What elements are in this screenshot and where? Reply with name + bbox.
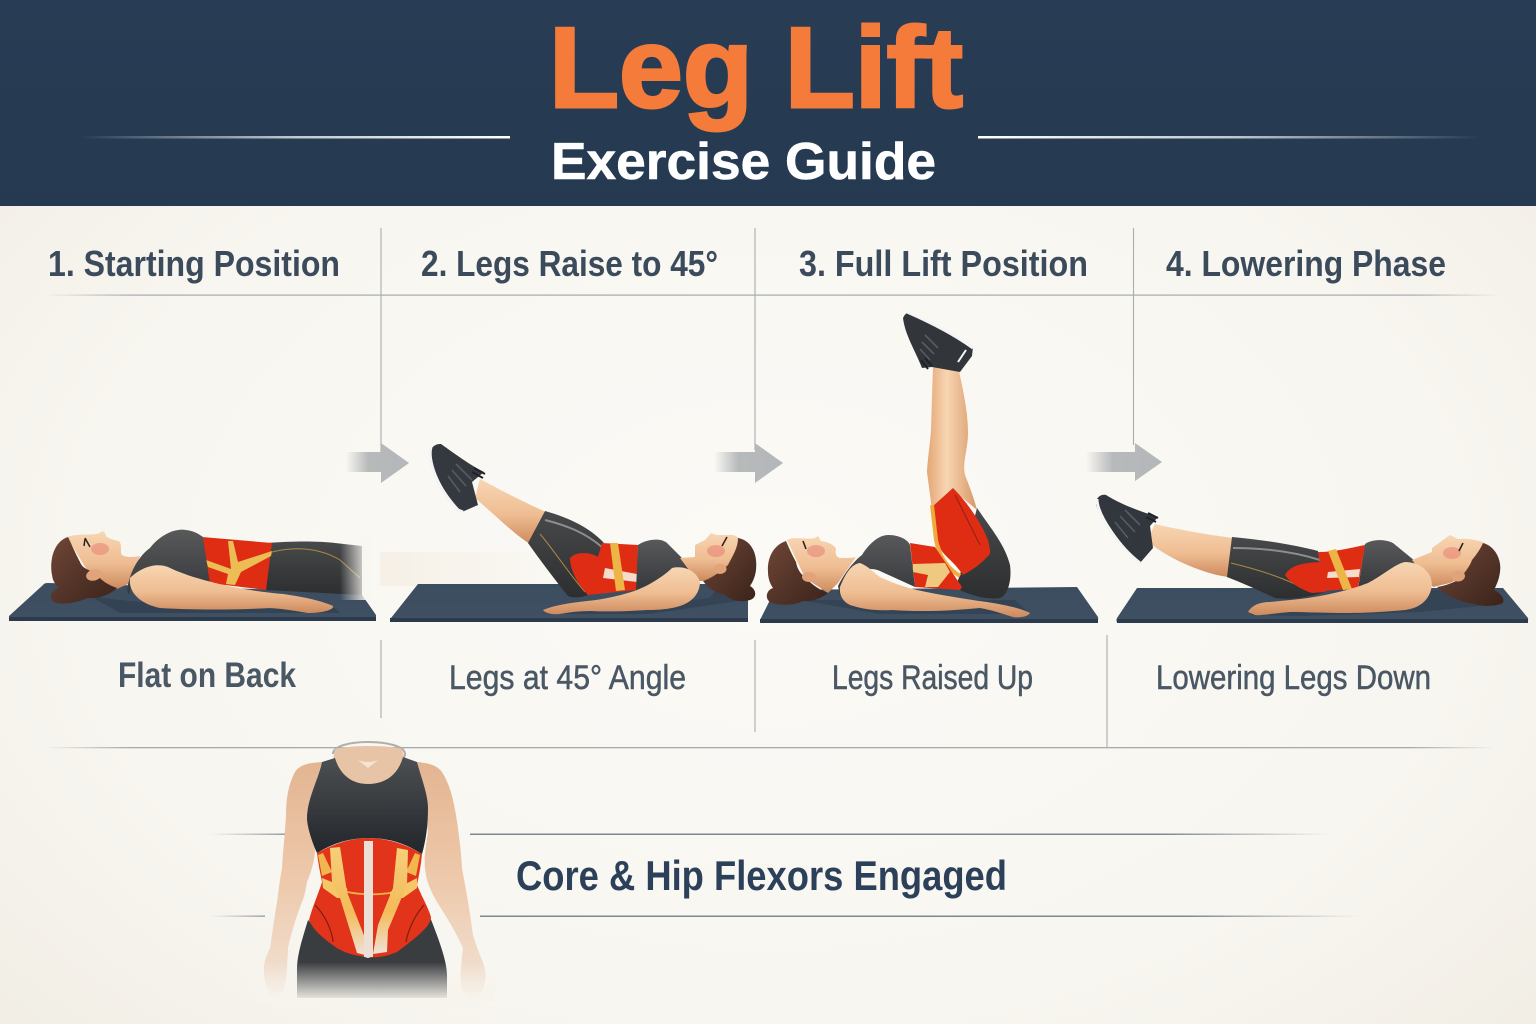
left arm <box>264 762 322 998</box>
shoe <box>430 444 485 512</box>
hair <box>767 541 828 605</box>
abs muscle <box>309 838 431 957</box>
figure 1: starting position <box>9 530 376 621</box>
arm <box>543 567 700 614</box>
thigh muscle <box>932 488 990 575</box>
mat <box>390 584 748 622</box>
tank top <box>838 535 915 595</box>
arrow 1 <box>346 443 409 483</box>
blush and eye <box>1443 547 1461 559</box>
abs muscle <box>587 543 638 595</box>
heading 4: 4. Lowering Phase <box>1166 243 1446 284</box>
shorts <box>1227 537 1325 599</box>
linea alba <box>364 841 373 957</box>
tank top <box>636 540 697 590</box>
header banner <box>0 0 1536 206</box>
grid lines <box>45 228 1500 917</box>
rectus tendons <box>330 847 408 955</box>
arm <box>840 563 1030 617</box>
hair <box>703 538 756 601</box>
red thigh <box>570 553 603 595</box>
head and neck <box>680 533 745 581</box>
heading 2: 2. Legs Raise to 45° <box>421 243 718 284</box>
bottom fade <box>255 962 495 1002</box>
shorts <box>528 511 604 597</box>
lower oblique lines <box>315 905 424 942</box>
arm <box>1248 562 1432 615</box>
abs muscle <box>1318 545 1365 591</box>
blush and eye <box>807 545 825 557</box>
floor glow <box>380 552 560 586</box>
heading 1: 1. Starting Position <box>48 243 340 284</box>
ear <box>1451 570 1465 582</box>
mat shadow <box>1250 590 1480 616</box>
head and neck <box>787 536 856 593</box>
abs muscle <box>202 537 272 590</box>
ear <box>85 568 103 582</box>
tank top <box>307 757 428 854</box>
ear <box>714 564 726 574</box>
engagement label: Core & Hip Flexors Engaged <box>516 852 1007 899</box>
torso anatomy figure <box>255 742 495 1002</box>
tank top <box>1358 540 1432 589</box>
ear <box>802 572 816 582</box>
figure 3: full lift <box>760 312 1098 623</box>
blush and eye <box>91 543 109 555</box>
neck and chest <box>332 746 406 785</box>
leggings <box>266 542 362 595</box>
mat shadow <box>800 600 1030 614</box>
captions <box>118 656 1431 697</box>
caption 2: Legs at 45° Angle <box>449 659 686 697</box>
mat <box>1116 588 1528 623</box>
leggings <box>297 917 447 998</box>
caption 4: Lowering Legs Down <box>1156 659 1431 697</box>
arrow 2 <box>714 443 783 483</box>
tendinous bar <box>347 892 390 894</box>
mat shadow <box>545 584 745 614</box>
head and neck <box>67 531 140 589</box>
side tendons <box>318 853 420 898</box>
fade <box>340 535 370 600</box>
leg <box>927 362 977 510</box>
red thigh <box>1285 562 1325 593</box>
mat <box>760 587 1098 623</box>
subtitle: Exercise Guide <box>551 133 936 191</box>
arm <box>130 565 333 613</box>
lower legs <box>475 479 546 544</box>
neck outline <box>333 742 405 760</box>
tank top <box>127 530 210 595</box>
right arm <box>417 762 486 998</box>
arrow 3 <box>1086 443 1162 481</box>
mat <box>9 583 376 621</box>
lower legs <box>1147 524 1233 577</box>
hair <box>1437 543 1503 606</box>
mat shadow <box>90 596 340 613</box>
caption 1: Flat on Back <box>118 656 296 695</box>
figure 2: legs at 45 degrees <box>380 444 756 622</box>
shorts <box>955 508 1011 598</box>
step headings <box>48 243 1446 284</box>
caption 3: Legs Raised Up <box>832 659 1033 697</box>
shoe <box>903 312 973 372</box>
heading 3: 3. Full Lift Position <box>799 243 1088 284</box>
head and neck <box>1412 535 1485 587</box>
title: Leg Lift <box>549 5 963 132</box>
shoe <box>1096 495 1158 563</box>
hair <box>51 537 117 604</box>
blush and eye <box>707 545 725 557</box>
figure 4: lowering phase <box>1096 495 1528 623</box>
abs muscle <box>910 543 962 590</box>
